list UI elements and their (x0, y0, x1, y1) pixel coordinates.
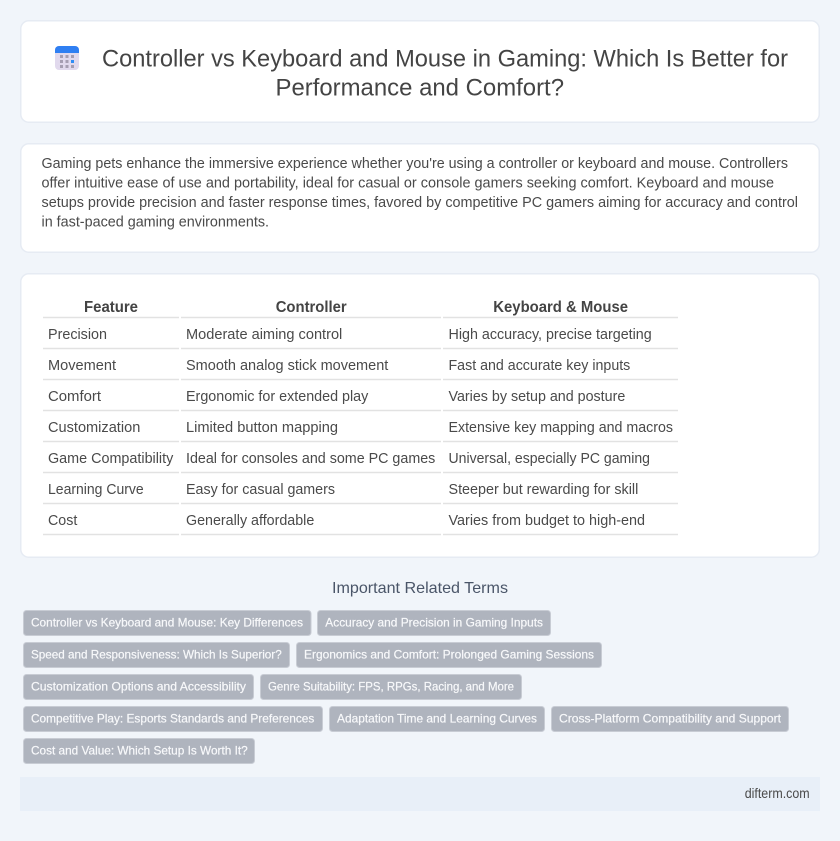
table row: movement (43, 358, 678, 380)
table row: learning curve: Learning Curve (48, 482, 144, 498)
tag (330, 706, 544, 732)
table row: comfort: Ergonomic for extended play (186, 389, 369, 405)
panel: related term tags (24, 610, 788, 764)
table row: precision: Moderate aiming control (186, 327, 342, 343)
table row: customization (43, 420, 678, 442)
table row: cost: Cost (48, 513, 77, 529)
tag: Speed and Responsiveness: Which Is Superior? (31, 648, 282, 662)
text block: introduction: offer intuitive ease of use and portability, ideal for casual or console gamers seeking comfort. Keyboard and mouse (42, 176, 774, 192)
panel: introduction paragraph (21, 144, 819, 252)
table row: learning curve: Steeper but rewarding for skill (448, 482, 638, 498)
table row: game compatibility: Ideal for consoles and some PC games (186, 451, 435, 467)
text block: introduction: in fast-paced gaming environments. (42, 214, 269, 230)
title: Performance and Comfort? (276, 75, 564, 102)
table row: cost: Generally affordable (186, 513, 314, 529)
tag: Customization Options and Accessibility (31, 680, 246, 694)
tag (24, 642, 290, 668)
tag (552, 706, 788, 732)
tag: Competitive Play: Esports Standards and Preferences (31, 712, 314, 726)
table row: comfort: Comfort (48, 389, 101, 405)
table row: customization: Extensive key mapping and macros (448, 420, 673, 436)
panel: comparison table (21, 274, 819, 557)
tag: Accuracy and Precision in Gaming Inputs (325, 616, 543, 630)
table row: customization: Customization (48, 420, 140, 436)
tag (260, 674, 522, 700)
table row: game compatibility: Game Compatibility (48, 451, 174, 467)
tag: Genre Suitability: FPS, RPGs, Racing, and More (268, 680, 514, 694)
tag: Cost and Value: Which Setup Is Worth It? (31, 744, 248, 758)
tag: Cross-Platform Compatibility and Support (559, 712, 782, 726)
table row: comfort (43, 389, 678, 410)
tag (296, 642, 602, 668)
footer (20, 777, 820, 811)
table row: cost: Varies from budget to high-end (448, 513, 645, 529)
table header row (43, 299, 678, 318)
table row: precision: Precision (48, 327, 107, 343)
table row: customization: Limited button mapping (186, 420, 338, 436)
table row: movement: Movement (48, 358, 116, 374)
heading: important related terms: Important Related Terms (332, 580, 508, 597)
table header row: Keyboard & Mouse (493, 299, 628, 316)
table row: movement: Fast and accurate key inputs (448, 358, 630, 374)
table row: game compatibility: Universal, especially PC gaming (448, 451, 650, 467)
tag: Controller vs Keyboard and Mouse: Key Differences (31, 616, 303, 630)
text block: introduction: setups provide precision and faster response times, favored by competitive PC gamers aiming for accuracy and control (42, 195, 798, 211)
tag: Adaptation Time and Learning Curves (337, 712, 537, 726)
title (102, 46, 788, 102)
footer source text: difterm.com (745, 786, 810, 801)
table row: game compatibility (43, 451, 678, 472)
table header row: Controller (276, 299, 347, 316)
tag: Ergonomics and Comfort: Prolonged Gaming Sessions (304, 648, 594, 662)
tag (24, 610, 311, 636)
tag (24, 674, 254, 700)
table row: comfort: Varies by setup and posture (448, 389, 625, 405)
text block: introduction (42, 156, 798, 230)
text block: introduction: Gaming pets enhance the immersive experience whether you're using a controller or keyboard and mouse. Controllers (42, 156, 788, 172)
tag (318, 610, 550, 636)
tag (24, 738, 254, 764)
icon: calendar keypad (55, 46, 79, 70)
table row: movement: Smooth analog stick movement (186, 358, 388, 374)
tag (24, 706, 322, 732)
table row: learning curve: Easy for casual gamers (186, 482, 335, 498)
table header row: Feature (84, 299, 138, 316)
title: Controller vs Keyboard and Mouse in Gaming: Which Is Better for (102, 46, 788, 73)
table row: cost (43, 513, 678, 534)
table row: precision (43, 327, 678, 348)
panel: header (21, 21, 819, 122)
table row: learning curve (43, 482, 678, 504)
table row: precision: High accuracy, precise targeting (448, 327, 652, 343)
